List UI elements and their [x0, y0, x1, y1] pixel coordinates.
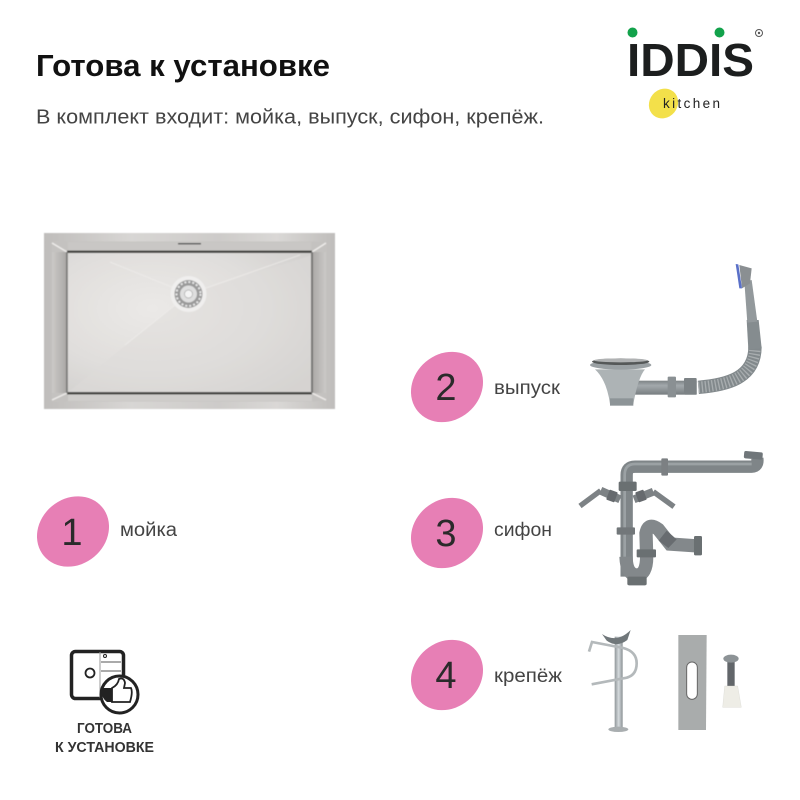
outlet photo	[590, 264, 762, 406]
item 4: badge	[397, 625, 497, 725]
item 3: badge	[397, 483, 497, 583]
item 1: badge: 1	[61, 512, 83, 554]
item 4: label: крепёж	[494, 666, 562, 687]
logo: IDDIS kitchen: IDDIS	[627, 34, 754, 86]
item 4: badge: 4	[435, 655, 457, 697]
bracket plate	[678, 635, 707, 730]
siphon photo	[580, 451, 763, 585]
subtitle text: В комплект входит: мойка, выпуск, сифон, крепёж.	[36, 106, 544, 128]
sink photo	[44, 233, 335, 409]
logo: IDDIS kitchen: kitchen	[663, 96, 720, 111]
item 3: label: сифон	[494, 520, 552, 541]
logo: IDDIS kitchen	[627, 28, 762, 124]
item 3: badge: 3	[435, 513, 457, 555]
item 2: badge	[397, 337, 497, 437]
fasteners photo	[589, 630, 741, 732]
drain	[170, 276, 206, 312]
title: Готова к установке	[36, 48, 330, 83]
clamp screw	[589, 630, 637, 732]
item 1: label: мойка	[120, 520, 177, 541]
icon: sink with thumbs up	[72, 652, 138, 713]
item 2: badge: 2	[435, 367, 457, 409]
item 2: label: выпуск	[494, 378, 561, 399]
badge: ready to install	[55, 652, 154, 756]
bolt	[723, 655, 741, 707]
item 1: badge	[23, 482, 123, 581]
badge: ready to install: К УСТАНОВКЕ	[55, 740, 154, 756]
badge caption: ГОТОВА	[77, 721, 132, 737]
